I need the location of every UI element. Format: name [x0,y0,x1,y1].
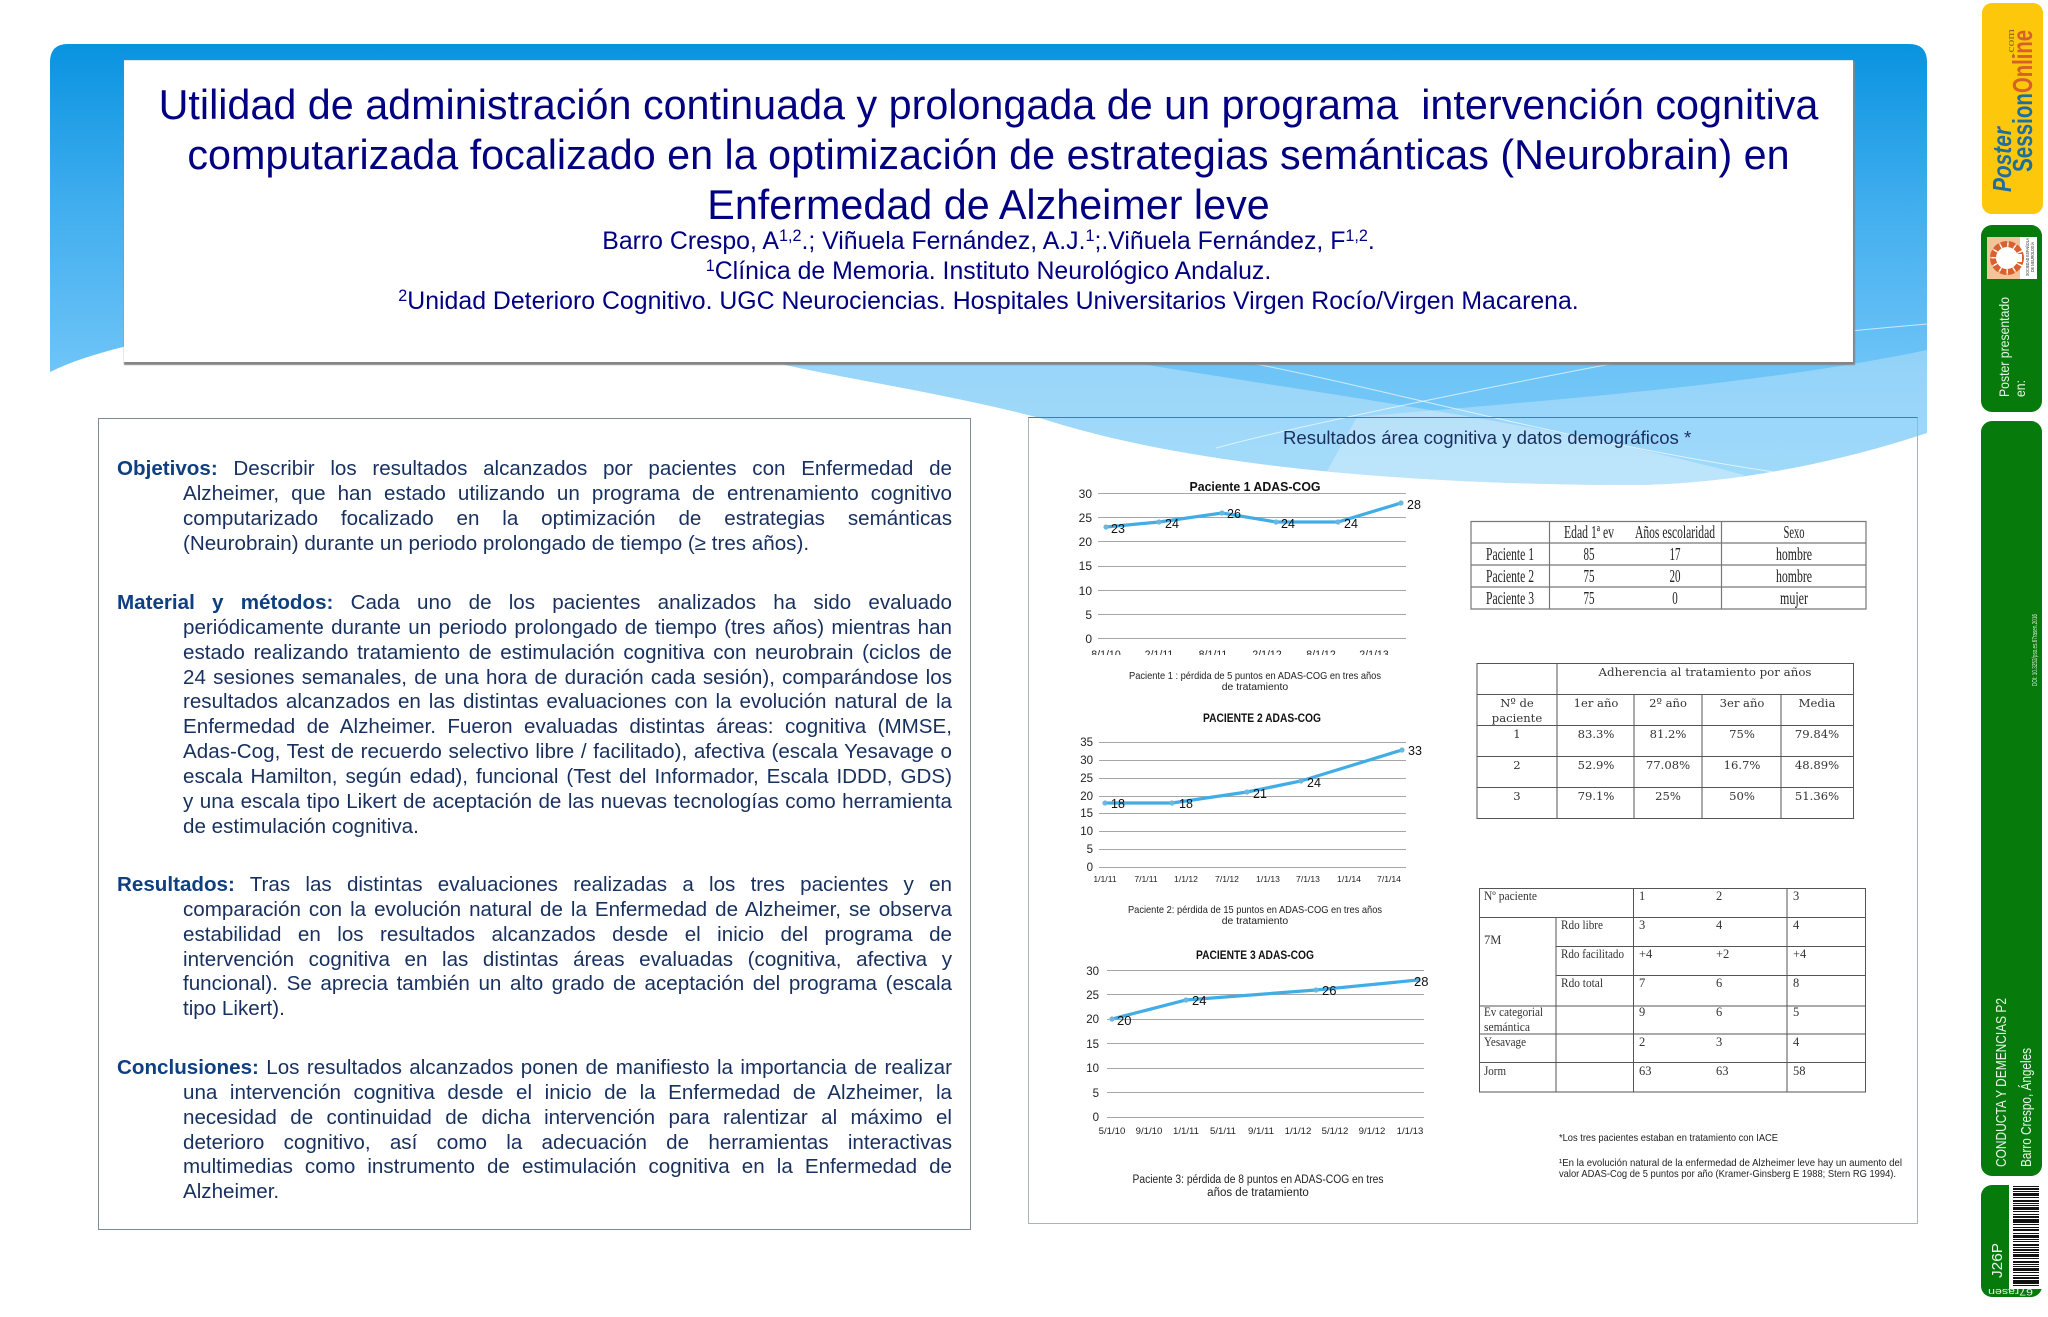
table: resultados por paciente: 4 [1793,1035,1800,1049]
table: resultados por paciente: 8 [1793,976,1799,990]
line chart: paciente 1 [1079,480,1421,661]
line chart: paciente 1: 20 [1079,535,1092,549]
table: resultados por paciente: Ev categorial [1484,1005,1543,1019]
line chart: paciente 2: 33 [1408,744,1422,758]
table: adherencia al tratamiento: paciente [1492,711,1542,725]
table: resultados por paciente: +4 [1639,947,1653,961]
sidebar: logo PosterSessionOnline: Online [2007,30,2038,93]
icon: society brain logo [1987,237,2037,279]
text block: resultados: intervención cognitiva en las distintas áreas evaluadas (cognitiva, afectiva y [183,948,952,971]
line chart: paciente 3: 26 [1322,983,1336,998]
sidebar: poster code and barcode [1981,1185,2042,1297]
authors and affiliations [398,227,1579,315]
table: resultados por paciente: +4 [1793,947,1807,961]
sidebar: logo PosterSessionOnline: Poster [1987,125,2017,192]
table: resultados por paciente: 6 [1716,976,1722,990]
table: adherencia al tratamiento: 3 [1513,789,1521,803]
heading: results: Resultados área cognitiva y datos demográficos * [1283,427,1691,448]
line chart: paciente 1: 2/1/13 [1359,649,1389,661]
table: resultados por paciente: 3 [1639,918,1645,932]
poster title: Utilidad de administración continuada y prolongada de un programa intervención cognitiva [159,82,1818,128]
table: adherencia al tratamiento: Adherencia al tratamiento por años [1597,665,1812,679]
table: adherencia al tratamiento: 1 [1513,727,1521,741]
title box [124,60,1853,362]
text block: resultados [117,873,952,1020]
table: resultados por paciente: 63 [1716,1064,1728,1078]
line chart: paciente 1: 10 [1079,584,1092,598]
table: resultados por paciente: 1 [1639,889,1645,903]
table: adherencia al tratamiento: 79.1% [1578,789,1614,803]
line chart: paciente 2: 1/1/13 [1256,874,1280,884]
table: datos demograficos: 75 [1584,566,1594,586]
table: resultados por paciente: 6 [1716,1005,1722,1019]
table: adherencia al tratamiento: 81.2% [1650,727,1686,741]
table: resultados por paciente: Rdo libre [1561,918,1603,932]
text block: objetivos: computarizado focalizado en la optimización de estrategias semánticas [183,507,952,530]
table: datos demograficos: mujer [1780,588,1808,608]
table: resultados por paciente: 63 [1639,1064,1652,1078]
line chart: paciente 3: 5 [1093,1088,1099,1100]
line chart: paciente 2: 18 [1111,797,1125,811]
text block: resultados: tipo Likert). [183,997,285,1020]
line chart: paciente 3: 9/1/10 [1136,1126,1162,1137]
table: adherencia al tratamiento: Nº de [1500,696,1534,710]
line chart: paciente 1: 8/1/11 [1199,649,1227,661]
line chart: paciente 3: 20 [1117,1013,1131,1028]
line chart: paciente 2: 7/1/14 [1377,874,1401,884]
line chart: paciente 1: 2/1/11 [1145,649,1173,661]
panel: abstract text [98,418,971,1230]
line chart: paciente 1: 26 [1227,507,1241,521]
line chart: paciente 2: 15 [1080,808,1093,820]
line chart: paciente 3: 20 [1086,1014,1099,1026]
icon: society brain logo: DE NEUROLOGÍA [2029,242,2035,272]
table: resultados por paciente: 4 [1716,918,1723,932]
table: adherencia al tratamiento: 16.7% [1724,758,1760,772]
line chart: paciente 1: 15 [1079,559,1092,573]
table: datos demograficos: Sexo [1784,522,1804,542]
footnotes: *Los tres pacientes estaban en tratamiento con IACE [1559,1133,1778,1144]
table: datos demograficos [1471,521,1866,609]
caption: paciente 2: de tratamiento [1222,916,1288,927]
table: resultados por paciente: 5 [1793,1005,1799,1019]
table: datos demograficos: hombre [1776,566,1812,586]
table: resultados por paciente: 2 [1639,1035,1645,1049]
table: datos demograficos: 75 [1584,588,1594,608]
text block: objetivos: Objetivos: Describir los resultados alcanzados por pacientes con Enfermedad de [117,457,952,480]
table: datos demograficos: Paciente 3 [1486,588,1534,608]
table: adherencia al tratamiento: 2º año [1649,696,1687,710]
line chart: paciente 3: 30 [1086,966,1099,978]
line chart: paciente 1: 0 [1085,632,1092,646]
line chart: paciente 1: 24 [1165,517,1179,531]
table: datos demograficos: Edad 1ª ev [1564,522,1614,542]
text block: conclusiones: multimedias como instrumento de estimulación cognitiva en la Enfermedad de [183,1155,952,1178]
line chart: paciente 2: 21 [1253,787,1267,801]
line chart: paciente 3: 1/1/11 [1173,1126,1199,1137]
line chart: paciente 2: 35 [1080,737,1093,749]
text block: conclusiones: Conclusiones: Los resultados alcanzados ponen de manifiesto la importancia de realizar [117,1056,952,1079]
sidebar: poster presentado en: en: [2012,380,2028,397]
table: adherencia al tratamiento: 75% [1729,727,1755,741]
table: adherencia al tratamiento: 52.9% [1578,758,1614,772]
sidebar: logo PosterSessionOnline: .com [2006,29,2017,56]
line chart: paciente 2: 25 [1080,773,1093,785]
line chart: paciente 1: Paciente 1 ADAS-COG [1190,480,1320,494]
table: resultados por paciente [1480,888,1866,1092]
table: datos demograficos: 20 [1670,566,1680,586]
text block: resultados: Resultados: Tras las distintas evaluaciones realizadas a los tres pacientes y en [117,873,952,896]
text block: conclusiones: deterioro cognitivo, así como la adecuación de herramientas interactivas [183,1131,952,1154]
line chart: paciente 1: 8/1/12 [1306,649,1336,661]
line chart: paciente 3: 25 [1086,990,1099,1002]
line chart: paciente 2: 7/1/11 [1134,874,1158,884]
table: adherencia al tratamiento: 1er año [1574,696,1618,710]
sidebar: poster code and barcode: 67rasen [1988,1286,2033,1297]
table: resultados por paciente: 3 [1793,889,1799,903]
table: datos demograficos: hombre [1776,544,1812,564]
text block: objetivos: (Neurobrain) durante un periodo prolongado de tiempo (≥ tres años). [183,532,809,555]
line chart: paciente 1: 23 [1111,522,1125,536]
sidebar: session info: CONDUCTA Y DEMENCIAS P2 [1994,998,2010,1167]
text block: resultados: funcional). Se aprecia también un alto grado de aceptación del programa (escala [183,972,952,995]
text block: material y metodos: de estimulación cognitiva. [183,815,419,838]
table: resultados por paciente: Yesavage [1484,1035,1526,1049]
table: resultados por paciente: semántica [1484,1020,1530,1034]
line chart: paciente 3: 28 [1414,974,1428,989]
line chart: paciente 1: 5 [1085,608,1092,622]
line chart: paciente 3: 9/1/12 [1359,1126,1385,1137]
text block: material y metodos: estado realizando tratamiento de estimulación cognitiva con neurobrain (ciclos de [183,641,952,664]
line chart: paciente 3: 5/1/11 [1210,1126,1236,1137]
table: adherencia al tratamiento: 3er año [1720,696,1764,710]
caption: paciente 1 [1129,671,1381,693]
caption: paciente 3 [1132,1174,1384,1199]
text block: material y metodos: escala Hamilton, según edad), funcional (Test del Informador, Escala IDDD, GDS) [183,765,952,788]
line chart: paciente 2: 7/1/12 [1215,874,1239,884]
table: resultados por paciente: 9 [1639,1005,1645,1019]
sidebar: poster presentado en [1981,225,2042,412]
authors and affiliations: 2Unidad Deterioro Cognitivo. UGC Neurociencias. Hospitales Universitarios Virgen Rocío/Virgen Macarena. [398,287,1579,315]
text block: conclusiones [117,1056,952,1203]
sidebar: poster presentado en: Poster presentado [1996,297,2012,397]
authors and affiliations: 1Clínica de Memoria. Instituto Neurológico Andaluz. [706,257,1271,285]
caption: paciente 3: años de tratamiento [1207,1187,1309,1199]
caption: paciente 2 [1128,905,1382,927]
table: resultados por paciente: Rdo facilitado [1561,947,1624,961]
text block: objetivos: Alzheimer, que han estado utilizando un programa de entrenamiento cognitivo [183,482,952,505]
line chart: paciente 1: 2/1/12 [1252,649,1282,661]
line chart: paciente 3: 1/1/13 [1397,1126,1423,1137]
table: datos demograficos: 85 [1584,544,1594,564]
line chart: paciente 1: 30 [1079,487,1092,501]
sidebar: session info: Barro Crespo, Ángeles [2018,1048,2035,1167]
background: blue wave banner [50,44,1927,485]
caption: paciente 3: Paciente 3: pérdida de 8 puntos en ADAS-COG en tres [1132,1174,1384,1186]
line chart: paciente 3: PACIENTE 3 ADAS-COG [1196,950,1314,962]
table: datos demograficos: 0 [1672,588,1678,608]
line chart: paciente 2 [1080,713,1422,884]
line chart: paciente 3: 5/1/12 [1322,1126,1348,1137]
text block: conclusiones: una intervención cognitiva desde el inicio de la Enfermedad de Alzheimer, la [183,1081,952,1104]
text block: material y metodos: y una escala tipo Likert de aceptación de las nuevas tecnologías como herramienta [183,790,952,813]
text block: material y metodos: Enfermedad de Alzheimer. Fueron evaluadas distintas áreas: cognitiva (MMSE, [183,715,952,738]
authors and affiliations: Barro Crespo, A1,2.; Viñuela Fernández, A.J.1;.Viñuela Fernández, F1,2. [602,227,1375,255]
line chart: paciente 3: 1/1/12 [1285,1126,1311,1137]
table: resultados por paciente: 2 [1716,889,1722,903]
table: resultados por paciente: Nº paciente [1484,889,1537,903]
line chart: paciente 2: 18 [1179,797,1193,811]
caption: paciente 2: Paciente 2: pérdida de 15 puntos en ADAS-COG en tres años [1128,905,1382,916]
line chart: paciente 3: 15 [1086,1039,1099,1051]
poster title: computarizada focalizado en la optimización de estrategias semánticas (Neurobrain) en [187,132,1790,178]
footnotes: valor ADAS-Cog de 5 puntos por año (Kramer-Ginsberg E 1988; Stern RG 1994). [1559,1169,1896,1180]
text block: material y metodos [117,591,952,838]
table: resultados por paciente: Rdo total [1561,976,1603,990]
sidebar: logo PosterSessionOnline: Session [2007,93,2038,172]
table: datos demograficos: Paciente 2 [1486,566,1534,586]
line chart: paciente 2: 30 [1080,755,1093,767]
text block: material y metodos: Adas-Cog, Test de recuerdo selectivo libre / facilitado), afectiva (escala Yesavage o [183,740,952,763]
text block: conclusiones: Alzheimer. [183,1180,279,1203]
table: resultados por paciente: Jorm [1484,1064,1506,1078]
line chart: paciente 2: 1/1/11 [1093,874,1117,884]
table: resultados por paciente: 4 [1793,918,1800,932]
panel: results frame [1028,417,1918,1224]
sidebar: session info: DOI: 10.3252/pso.es.67rasen.2016 [2030,614,2039,686]
text block: objetivos [117,457,952,555]
line chart: paciente 1: 28 [1407,498,1421,512]
line chart: paciente 1: 8/1/10 [1091,649,1121,661]
sidebar: poster code and barcode: J26P [1989,1243,2006,1278]
line chart: paciente 2: 1/1/12 [1174,874,1198,884]
table: adherencia al tratamiento: 77.08% [1646,758,1690,772]
footnotes [1559,1133,1902,1180]
line chart: paciente 3: 9/1/11 [1248,1126,1274,1137]
table: datos demograficos: Años escolaridad [1635,522,1715,542]
table: adherencia al tratamiento: 79.84% [1795,727,1839,741]
table: adherencia al tratamiento: 2 [1513,758,1521,772]
table: adherencia al tratamiento: 25% [1655,789,1681,803]
table: adherencia al tratamiento: Media [1799,696,1835,710]
line chart: paciente 3: 24 [1192,993,1206,1008]
line chart: paciente 2: 7/1/13 [1296,874,1320,884]
line chart: paciente 3 [1086,950,1428,1137]
line chart: paciente 2: 0 [1087,862,1093,874]
table: resultados por paciente: +2 [1716,947,1729,961]
line chart: paciente 2: 5 [1087,844,1093,856]
text block: conclusiones: necesidad de continuidad de dicha intervención para ralentizar al máximo el [183,1106,952,1129]
text block: material y metodos: periódicamente durante un periodo prolongado de tiempo (tres años) mientras han [183,616,952,639]
table: adherencia al tratamiento [1477,664,1854,818]
line chart: paciente 3: 0 [1093,1112,1099,1124]
line chart: paciente 1: 25 [1079,511,1092,525]
line chart: paciente 2: 20 [1080,791,1093,803]
sidebar: logo PosterSessionOnline [1982,3,2043,214]
table: adherencia al tratamiento: 48.89% [1795,758,1839,772]
caption: paciente 1: de tratamiento [1222,682,1288,693]
table: adherencia al tratamiento: 83.3% [1578,727,1614,741]
text block: resultados: comparación con la evolución natural de la Enfermedad de Alzheimer, se observa [183,898,952,921]
poster title: Enfermedad de Alzheimer leve [707,182,1270,228]
line chart: paciente 1: 24 [1281,517,1295,531]
line chart: paciente 2: PACIENTE 2 ADAS-COG [1203,713,1321,725]
line chart: paciente 2: 10 [1080,826,1093,838]
poster title [159,82,1818,228]
line chart: paciente 3: 10 [1086,1063,1099,1075]
text block: material y metodos: 24 sesiones semanales, de una hora de duración cada sesión), comparándose los [183,666,952,689]
line chart: paciente 2: 1/1/14 [1337,874,1361,884]
table: adherencia al tratamiento: 51.36% [1795,789,1839,803]
text block: material y metodos: Material y métodos: Cada uno de los pacientes analizados ha sido evaluado [117,591,952,614]
sidebar: session info [1981,421,2042,1176]
table: datos demograficos: Paciente 1 [1486,544,1534,564]
line chart: paciente 3: 5/1/10 [1099,1126,1125,1137]
icon: society brain logo: SOCIEDAD ESPAÑOLA [2024,238,2030,276]
text block: resultados: estabilidad en los resultados alcanzados desde el inicio del programa de [183,923,952,946]
table: resultados por paciente: 7M [1484,933,1501,947]
table: datos demograficos: 17 [1670,544,1680,564]
table: adherencia al tratamiento: 50% [1729,789,1755,803]
caption: paciente 1: Paciente 1 : pérdida de 5 puntos en ADAS-COG en tres años [1129,671,1381,682]
line chart: paciente 1: 24 [1344,517,1358,531]
line chart: paciente 2: 24 [1307,776,1321,790]
text block: material y metodos: resultados alcanzados en las distintas evaluaciones con la evolución natural de la [183,690,952,713]
table: resultados por paciente: 3 [1716,1035,1722,1049]
table: resultados por paciente: 58 [1793,1064,1806,1078]
footnotes: ¹En la evolución natural de la enfermedad de Alzheimer leve hay un aumento del [1559,1158,1902,1169]
table: resultados por paciente: 7 [1639,976,1645,990]
